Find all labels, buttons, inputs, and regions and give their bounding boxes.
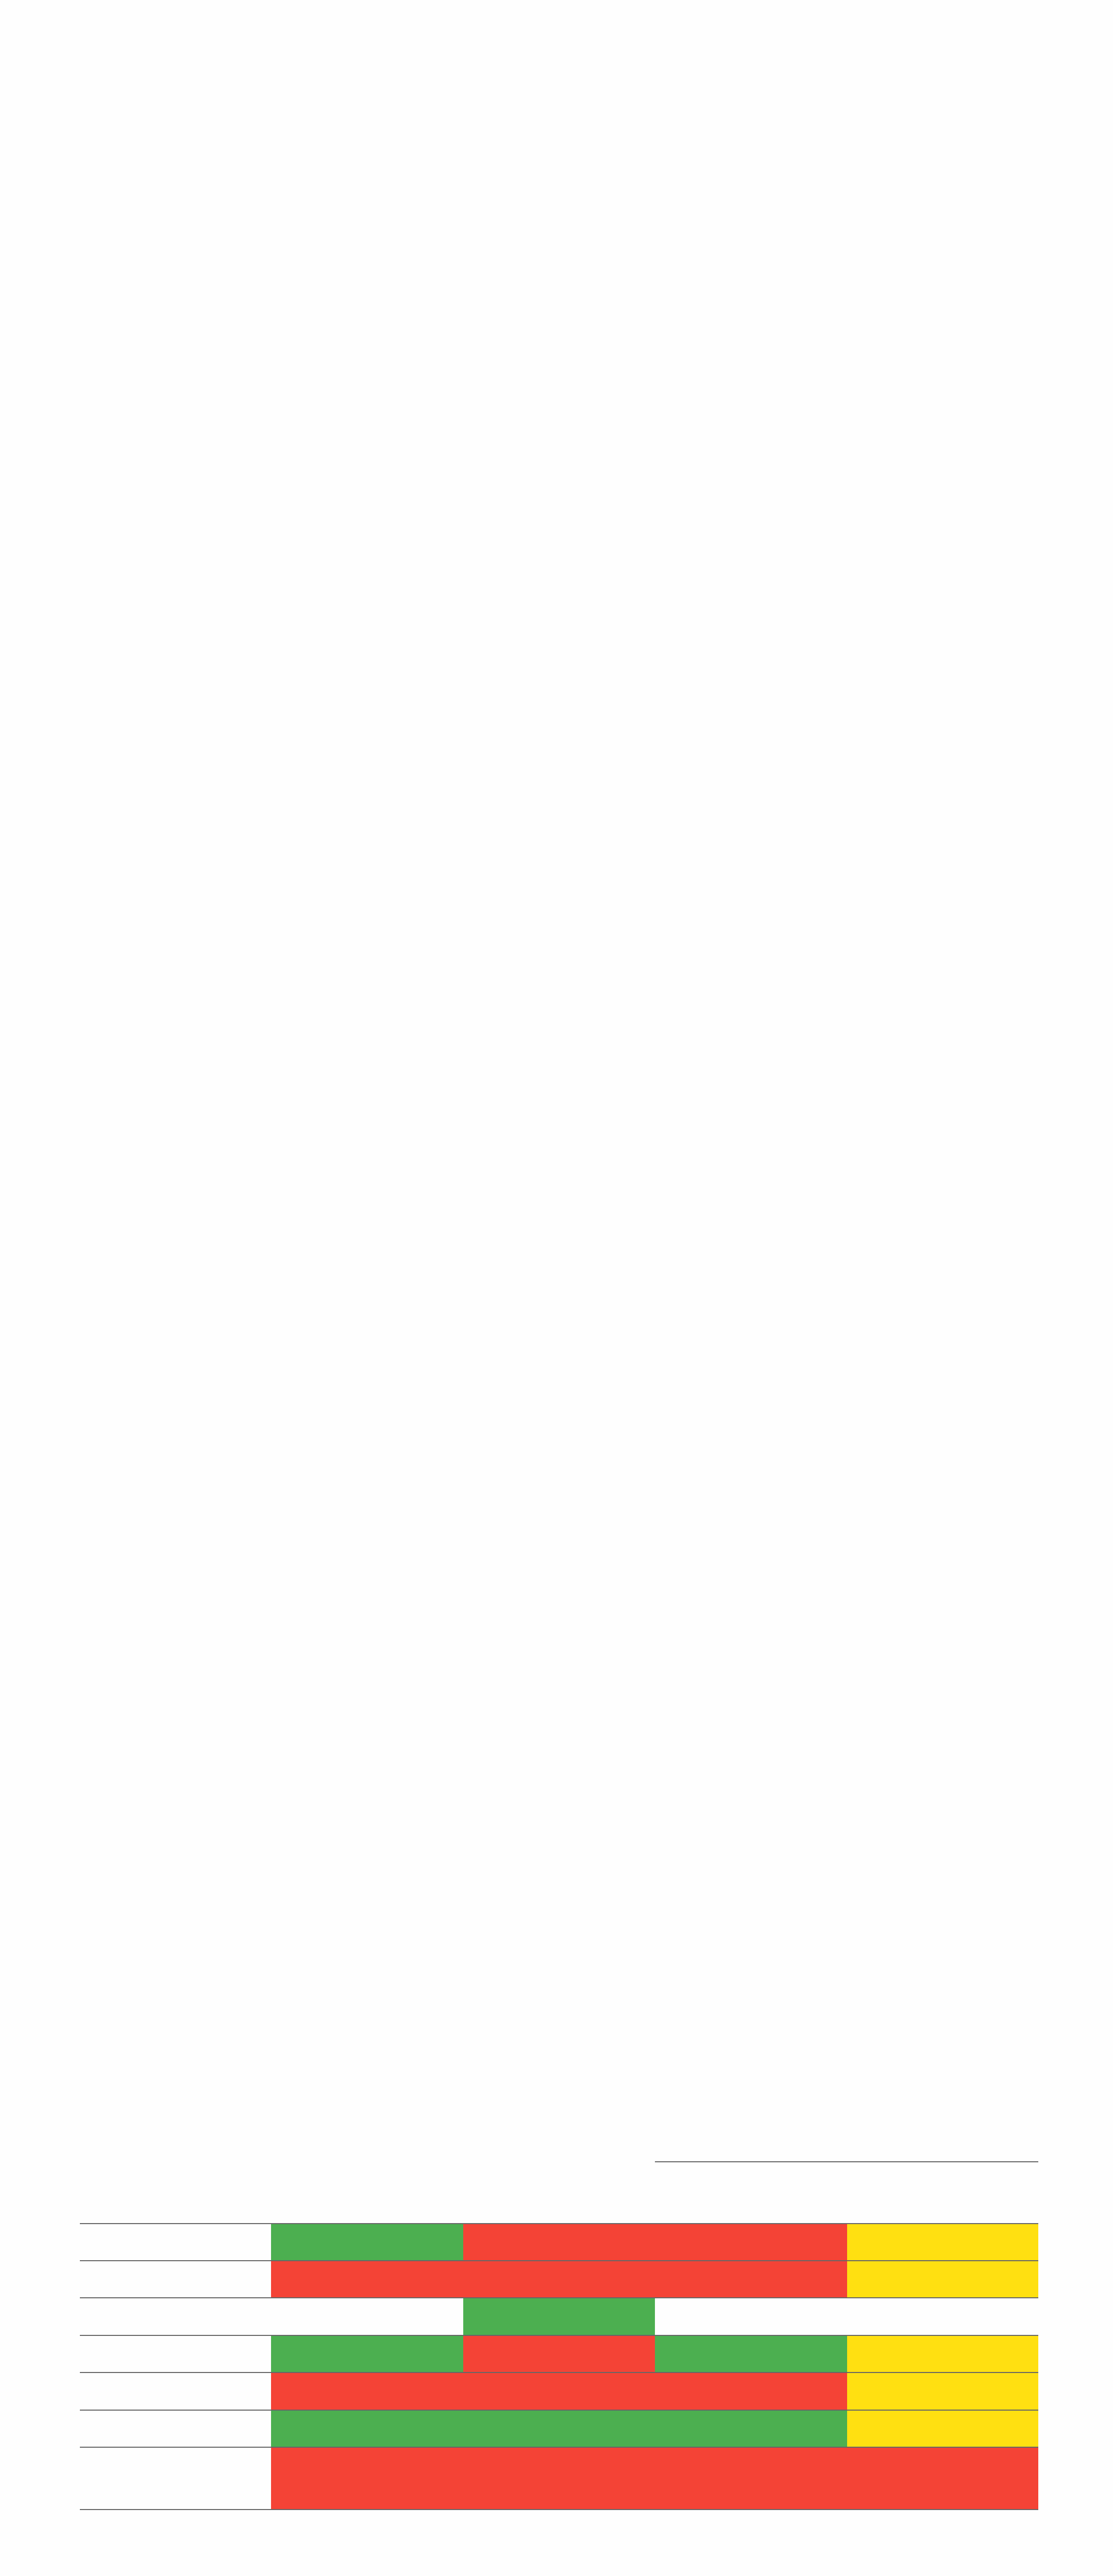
row 2 cells <box>271 2261 1038 2297</box>
row 7 cells <box>271 2448 1038 2509</box>
row 4 cells <box>271 2336 1038 2372</box>
row 1 cells <box>271 2224 1038 2260</box>
row 3 cells <box>463 2298 655 2335</box>
row 5 cells <box>271 2373 1038 2410</box>
header rule <box>655 2161 1038 2162</box>
table 1: status grid <box>80 2161 1038 2510</box>
row 6 cells <box>271 2411 1038 2447</box>
